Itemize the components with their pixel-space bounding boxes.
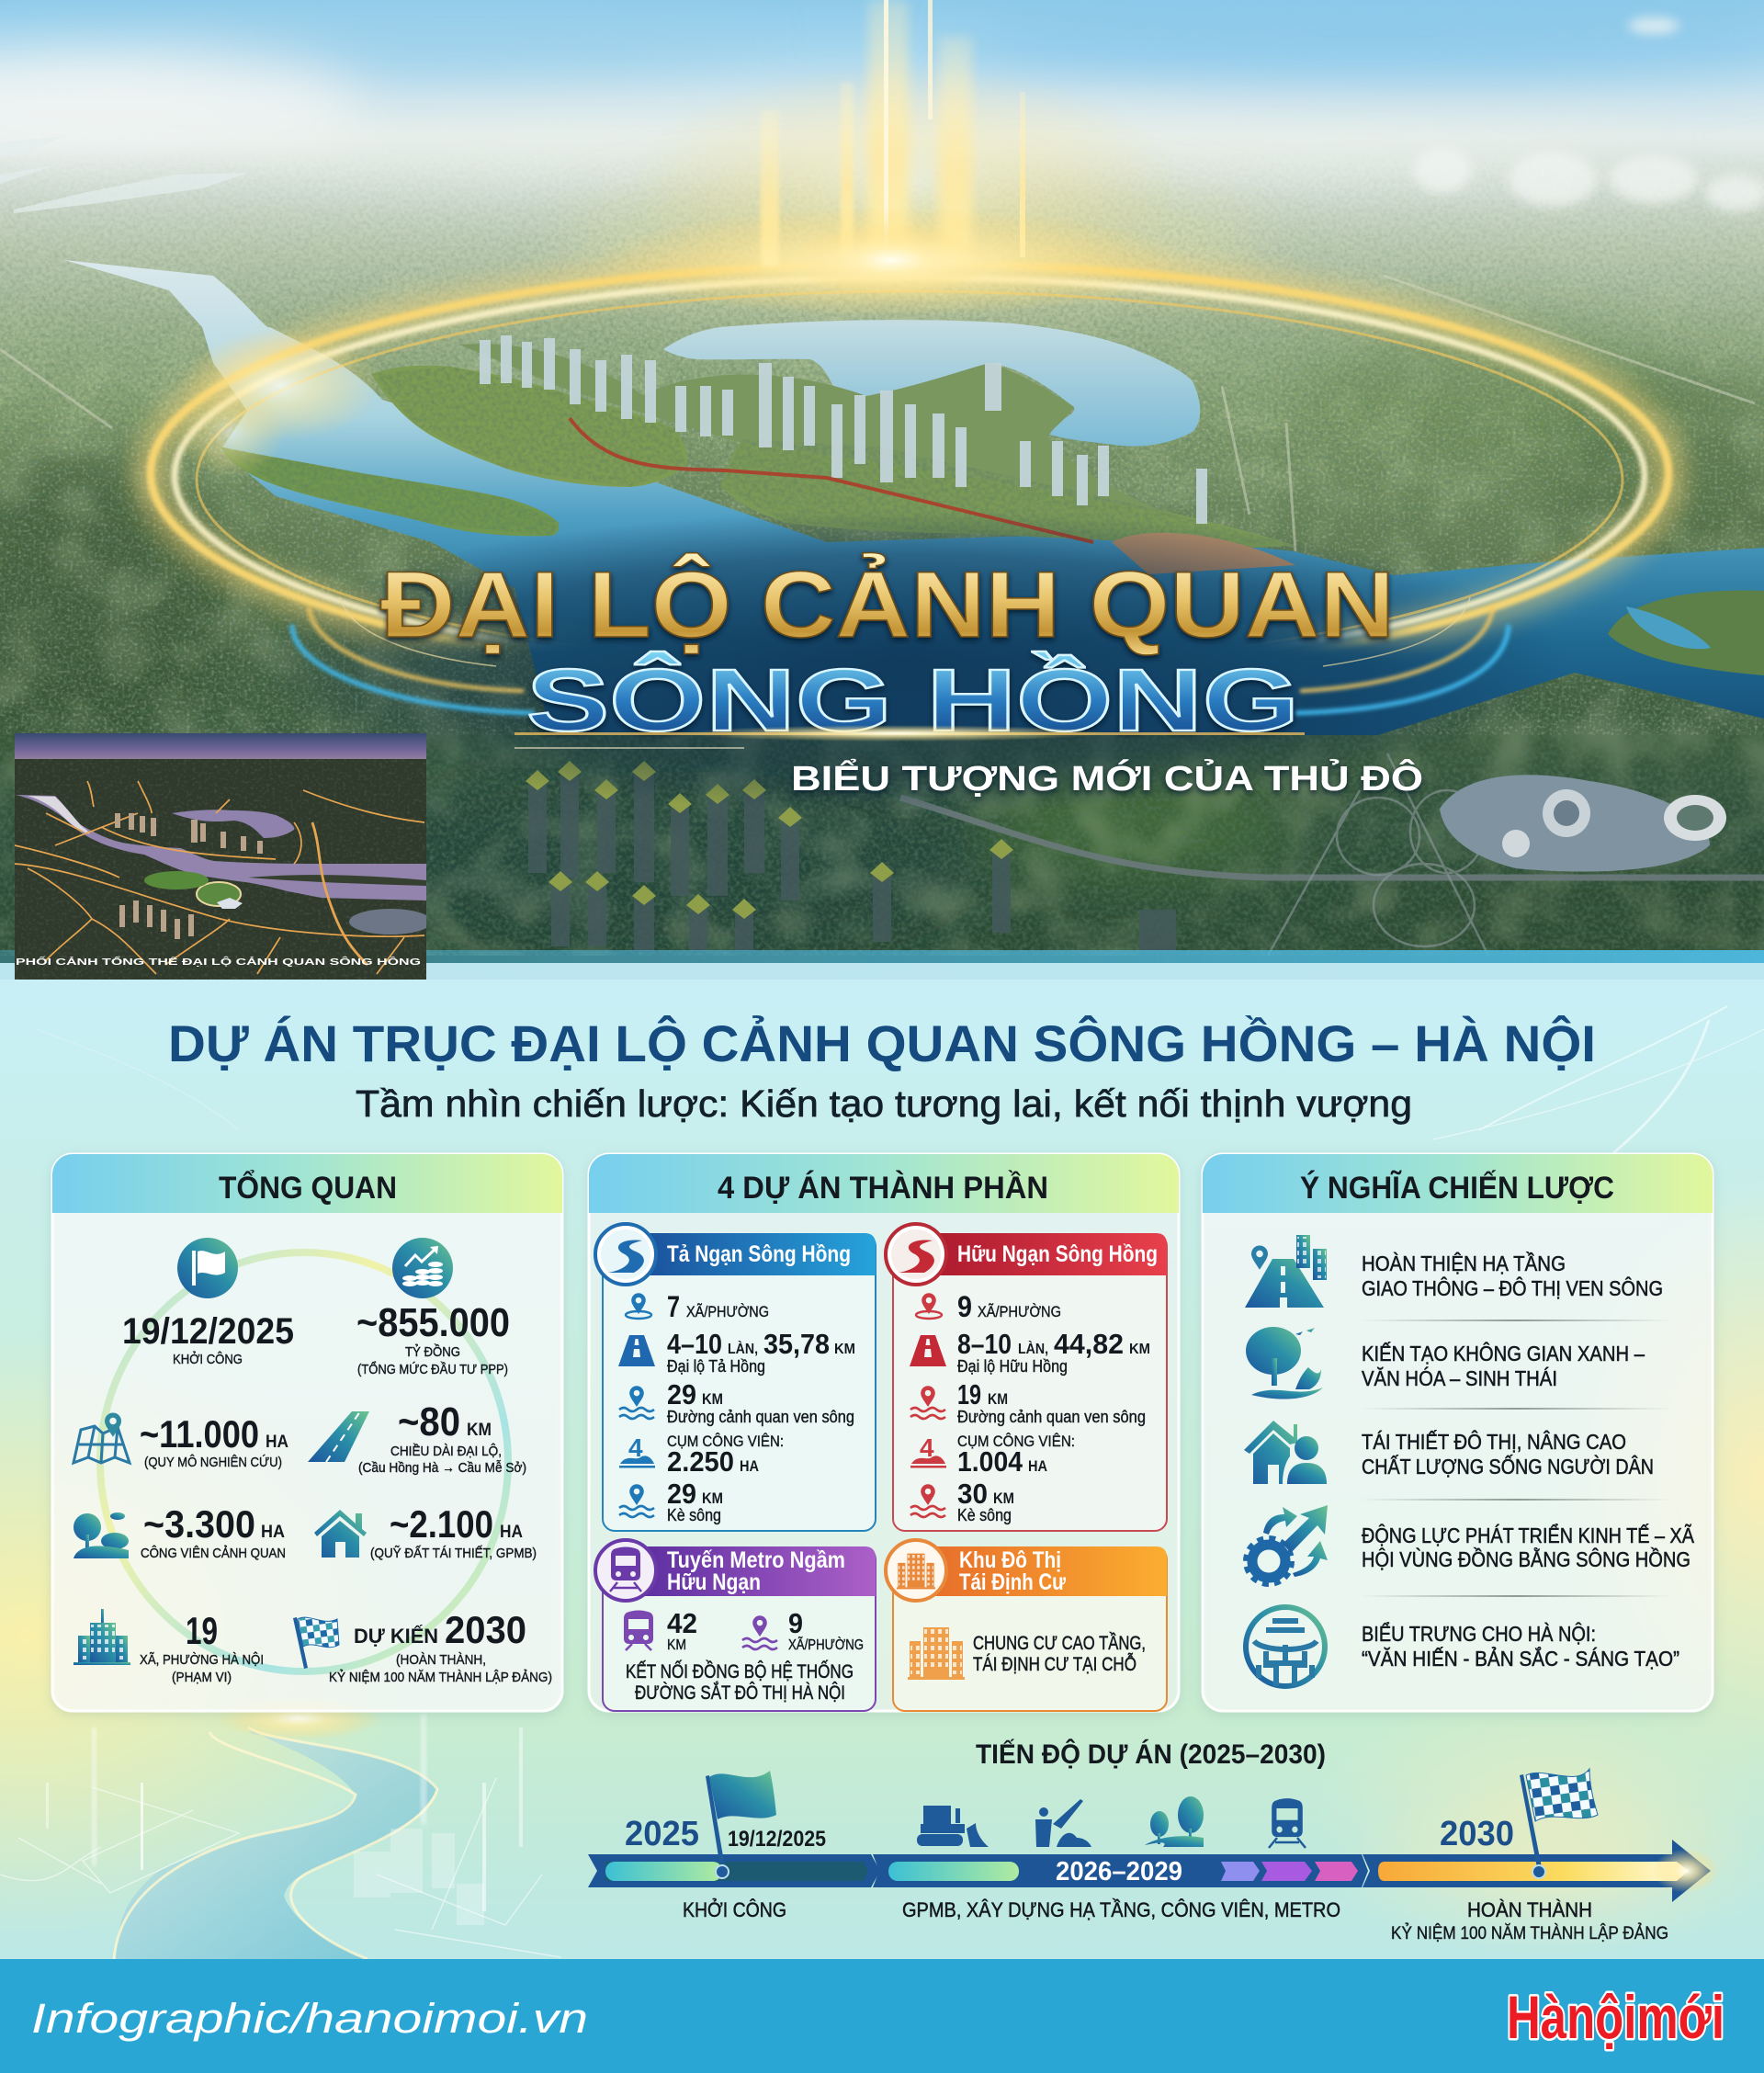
row: park clusters: 4 — [628, 1433, 643, 1462]
card body — [603, 1234, 876, 1531]
stat: land fund: (QUỸ ĐẤT TÁI THIẾT, GPMB) — [370, 1546, 537, 1561]
icon: flag badge — [177, 1238, 238, 1298]
card header — [916, 1233, 1167, 1275]
row: lanes: 4–10 — [667, 1328, 722, 1360]
label 2030: 2030 — [1440, 1815, 1514, 1853]
timeline title: TIẾN ĐỘ DỰ ÁN (2025–2030) — [976, 1739, 1326, 1770]
interchange — [1268, 753, 1488, 956]
row: embankment: Kè sông — [957, 1506, 1012, 1524]
panel heading: TỔNG QUAN — [219, 1171, 397, 1206]
label 2030: HOÀN THÀNH — [1467, 1898, 1592, 1921]
icon: house — [314, 1510, 367, 1558]
night lake — [172, 810, 294, 838]
item: green space — [1246, 1327, 1645, 1399]
stat: land fund: HA — [500, 1523, 523, 1542]
sub card: Hữu Ngạn Sông Hồng — [886, 1224, 1167, 1531]
stat: start date — [122, 1311, 294, 1367]
stat: boulevard length: CHIỀU DÀI ĐẠI LỘ, — [390, 1444, 502, 1459]
stat: completion: 2030 — [445, 1608, 526, 1651]
row: park clusters: HA — [740, 1457, 759, 1475]
bar segment 2025 — [588, 1854, 880, 1887]
row: lanes: Đại lộ Tả Hồng — [667, 1357, 765, 1376]
glow behind arrow head — [1332, 1784, 1764, 1958]
hero subtitle: BIỂU TƯỢNG MỚI CỦA THỦ ĐÔ — [791, 757, 1423, 799]
item: economic drive: ĐỘNG LỰC PHÁT TRIỂN KINH TẾ – XÃ — [1362, 1523, 1695, 1547]
card header — [626, 1233, 876, 1275]
sub heading: Tầm nhìn chiến lược: Kiến tạo tương lai, kết nối thịnh vượng — [356, 1082, 1412, 1125]
item: Hanoi emblem: “VĂN HIẾN - BẢN SẮC - SÁNG TẠO” — [1362, 1645, 1679, 1671]
gold road network — [15, 781, 424, 974]
item: infrastructure: GIAO THÔNG – ĐÔ THỊ VEN SÔNG — [1362, 1275, 1663, 1300]
stat: wards: 19 — [186, 1609, 218, 1652]
panel body — [52, 1154, 562, 1711]
icon: pin and waves — [742, 1615, 777, 1649]
bar segment 2026-2029: 2026–2029 — [1056, 1857, 1182, 1886]
row: lanes: 35,78 — [763, 1328, 830, 1360]
footer — [0, 1959, 1764, 2073]
stat: start date: 19/12/2025 — [122, 1311, 294, 1352]
panel heading: 4 DỰ ÁN THÀNH PHẦN — [718, 1171, 1048, 1206]
orange bridge — [570, 418, 1093, 542]
distant river upper left — [0, 166, 247, 213]
row: lanes — [910, 1328, 1150, 1376]
stat: wards — [140, 1609, 264, 1685]
card title: Tả Ngạn Sông Hồng — [667, 1241, 851, 1267]
title line 2: SÔNG HỒNG — [526, 651, 1299, 750]
highway — [900, 798, 1764, 878]
label construction: GPMB, XÂY DỰNG HẠ TẦNG, CÔNG VIÊN, METRO — [902, 1898, 1340, 1921]
inset image: night perspective of the boulevard — [15, 733, 432, 980]
panel: Ý nghĩa chiến lược — [1203, 1154, 1713, 1711]
icon: train — [624, 1610, 653, 1650]
item: infrastructure: HOÀN THIỆN HẠ TẦNG — [1362, 1251, 1566, 1275]
stadium plaza and sports domes — [1440, 775, 1726, 872]
sky haze — [0, 0, 1764, 184]
row: riverside road: Đường cảnh quan ven sông — [667, 1408, 854, 1426]
stat: land fund: ~2.100 — [390, 1502, 493, 1546]
stat: total investment: ~855.000 — [356, 1300, 510, 1345]
translucent buildings — [354, 1829, 484, 1925]
metro description: KẾT NỐI ĐỒNG BỘ HỆ THỐNG — [626, 1660, 854, 1682]
metro description — [626, 1660, 854, 1704]
row: lanes: 8–10 — [957, 1328, 1012, 1360]
timeline: project progress — [588, 1739, 1764, 1958]
footer credit: Infographic/hanoimoi.vn — [31, 1995, 588, 2042]
stat: metro wards: XÃ/PHƯỜNG — [788, 1635, 864, 1653]
icon: city buildings — [74, 1609, 130, 1665]
plaza right — [349, 909, 432, 935]
panel: Tổng quan — [52, 1154, 562, 1711]
night sky — [15, 733, 426, 763]
glowing river — [116, 1728, 437, 1959]
icon: road — [308, 1411, 369, 1462]
row: embankment: KM — [702, 1490, 723, 1507]
stat: completion: (HOÀN THÀNH, — [396, 1652, 486, 1668]
row: park clusters: 1.004 — [957, 1445, 1023, 1478]
stat: completion — [329, 1608, 552, 1685]
base gradient — [0, 980, 1764, 1959]
row: embankment: 30 — [957, 1478, 988, 1510]
icon: metro train — [1269, 1798, 1306, 1848]
stat: wards: XÃ, PHƯỜNG HÀ NỘI — [140, 1652, 264, 1668]
row: lanes: Đại lộ Hữu Hồng — [957, 1357, 1068, 1376]
lower section background — [0, 980, 1764, 1959]
item: infrastructure — [1245, 1235, 1663, 1308]
panel: 4 dự án thành phần — [589, 1154, 1179, 1711]
row: embankment: 29 — [667, 1478, 696, 1510]
bar segment 2030 — [1363, 1840, 1719, 1902]
footer band — [0, 1959, 1764, 2073]
row: park clusters: CỤM CÔNG VIÊN: — [957, 1433, 1075, 1450]
golf park — [144, 871, 209, 889]
panel header band — [1203, 1154, 1713, 1213]
sub card: Khu Đô Thị Tái Định Cư — [886, 1540, 1167, 1711]
row: lanes — [618, 1328, 855, 1376]
stat: metro length: 42 — [667, 1607, 697, 1639]
row: riverside road — [619, 1378, 854, 1426]
badge — [595, 1540, 656, 1601]
item: economic drive — [1246, 1505, 1695, 1584]
row: riverside road: Đường cảnh quan ven sông — [957, 1408, 1146, 1426]
item: urban renewal: TÁI THIẾT ĐÔ THỊ, NÂNG CAO — [1362, 1429, 1626, 1454]
row: riverside road: KM — [988, 1390, 1008, 1408]
right island with pond — [1608, 591, 1764, 675]
card title: Khu Đô Thị — [959, 1547, 1061, 1573]
stat: total investment: (TỔNG MỨC ĐẦU TƯ PPP) — [357, 1361, 508, 1377]
stat: boulevard length: (Cầu Hồng Hà → Cầu Mễ Sở) — [358, 1460, 526, 1476]
panel body — [1203, 1154, 1713, 1711]
row: riverside road: 29 — [667, 1378, 696, 1410]
lake north peninsula — [459, 344, 1176, 515]
card body — [893, 1547, 1167, 1711]
icon: park — [74, 1512, 129, 1558]
night river — [16, 795, 426, 901]
stat: land fund — [370, 1502, 537, 1561]
stat: park area: ~3.300 — [143, 1502, 255, 1546]
panel heading: Ý NGHĨA CHIẾN LƯỢC — [1300, 1171, 1614, 1206]
inset towers — [115, 813, 263, 939]
sky and land base — [0, 0, 1764, 980]
night river highlight — [28, 796, 89, 833]
bottom strip of hero — [0, 950, 1764, 980]
stat: total investment — [356, 1300, 510, 1377]
row: wards: 9 — [957, 1290, 972, 1323]
red river main channel — [64, 260, 1764, 735]
row: embankment: KM — [993, 1490, 1014, 1507]
item: green space: KIẾN TẠO KHÔNG GIAN XANH – — [1362, 1341, 1645, 1365]
stat: completion: DỰ KIẾN — [354, 1625, 438, 1648]
icon: coins with rising arrow — [392, 1238, 453, 1298]
land tone patches — [0, 179, 1764, 983]
icon: bulldozer — [917, 1806, 989, 1847]
row: riverside road: KM — [702, 1390, 723, 1408]
item: economic drive: HỘI VÙNG ĐỒNG BẰNG SÔNG HỒNG — [1362, 1546, 1690, 1571]
icon: checkered flag — [293, 1617, 339, 1669]
card body — [893, 1234, 1167, 1531]
badge — [886, 1540, 946, 1601]
row: riverside road: 19 — [957, 1378, 981, 1410]
row: lanes: LÀN, — [728, 1340, 758, 1357]
stat: metro wards: 9 — [788, 1607, 803, 1639]
row: wards: 7 — [667, 1290, 680, 1323]
tower roofs — [526, 761, 1013, 919]
golden light ring — [151, 264, 1668, 683]
card title: Tái Định Cư — [959, 1569, 1067, 1595]
title line 1: ĐẠI LỘ CẢNH QUAN — [380, 552, 1395, 657]
row: wards: XÃ/PHƯỜNG — [686, 1303, 769, 1320]
lower towers — [528, 772, 1176, 952]
icon: park with trees — [1145, 1796, 1204, 1847]
stat: total investment: TỶ ĐỒNG — [405, 1343, 460, 1360]
icon: apartment buildings — [908, 1627, 965, 1680]
description: TÁI ĐỊNH CƯ TẠI CHỖ — [973, 1653, 1136, 1675]
stat: start date: KHỞI CÔNG — [173, 1351, 243, 1367]
light pylons — [46, 1714, 523, 1911]
card title: Hữu Ngạn — [667, 1569, 761, 1595]
card body — [603, 1547, 876, 1711]
warm glow right — [1562, 1176, 1764, 1783]
stat: study scale: ~11.000 — [140, 1412, 259, 1456]
label 2030 — [1391, 1815, 1668, 1943]
row: wards — [626, 1290, 769, 1323]
card header — [916, 1546, 1167, 1596]
stat: park area — [141, 1502, 286, 1561]
row: embankment — [619, 1478, 723, 1524]
row: park clusters — [910, 1433, 1075, 1478]
gold line under title — [514, 725, 1305, 749]
item: green space: VĂN HÓA – SINH THÁI — [1362, 1366, 1557, 1390]
row: park clusters: 2.250 — [667, 1445, 734, 1478]
night city ground — [15, 759, 426, 980]
description: CHUNG CƯ CAO TẦNG, — [973, 1633, 1146, 1654]
stat: metro length: KM — [667, 1637, 686, 1653]
panel header band — [52, 1154, 562, 1213]
clouds upper right — [1413, 17, 1764, 211]
lower left island — [220, 447, 559, 536]
sub card: Tả Ngạn Sông Hồng — [595, 1224, 876, 1531]
label 2025: KHỞI CÔNG — [683, 1898, 786, 1921]
towers on peninsula — [480, 335, 1207, 524]
stadium — [197, 882, 243, 909]
row: wards — [916, 1290, 1061, 1323]
haze above ring — [629, 64, 1181, 303]
card title — [959, 1547, 1067, 1595]
flare above river — [216, 1696, 381, 1740]
badge — [595, 1224, 656, 1285]
icon: worker and excavator — [1035, 1799, 1091, 1847]
row: park clusters — [619, 1433, 784, 1478]
bar segment 2026-2029 — [873, 1854, 1368, 1887]
stat: boulevard length: KM — [467, 1421, 492, 1440]
stat: study scale: (QUY MÔ NGHIÊN CỨU) — [144, 1455, 282, 1470]
row: embankment — [910, 1478, 1014, 1524]
card title — [667, 1547, 845, 1595]
stat: study scale: HA — [266, 1433, 288, 1452]
item: urban renewal — [1244, 1421, 1654, 1484]
stat: study scale — [140, 1412, 288, 1470]
decorative ring — [100, 1252, 508, 1671]
row: park clusters: 4 — [920, 1433, 934, 1462]
stat: metro wards — [788, 1607, 864, 1653]
hero image: aerial view of the Red River landscape boulevard — [0, 0, 1764, 983]
central peninsula — [720, 438, 1294, 548]
metro description: ĐƯỜNG SẮT ĐÔ THỊ HÀ NỘI — [635, 1682, 845, 1704]
ring flare — [175, 207, 1185, 478]
icon: map with pin — [74, 1413, 130, 1463]
row: embankment: Kè sông — [667, 1506, 721, 1524]
card header — [626, 1546, 876, 1596]
flag 2030 — [1520, 1769, 1598, 1878]
row: park clusters: CỤM CÔNG VIÊN: — [667, 1433, 784, 1450]
row: riverside road — [910, 1378, 1146, 1426]
label 2025: 2025 — [625, 1815, 699, 1853]
main lake — [663, 320, 1200, 447]
panel header band — [589, 1154, 1179, 1213]
description — [973, 1633, 1146, 1675]
flag 2025 — [706, 1771, 776, 1878]
panel body — [589, 1154, 1179, 1711]
inset caption: PHỐI CẢNH TỔNG THỂ ĐẠI LỘ CẢNH QUAN SÔNG HỒNG — [16, 955, 421, 968]
island texture — [211, 358, 1314, 551]
stat: park area: CÔNG VIÊN CẢNH QUAN — [141, 1546, 286, 1561]
row: lanes: 44,82 — [1054, 1328, 1124, 1360]
dark glow behind title — [243, 510, 1566, 813]
circuit lines — [0, 1778, 560, 1957]
row: lanes: KM — [834, 1342, 855, 1357]
warm glow bottom right — [1314, 1691, 1764, 1911]
badge — [886, 1224, 946, 1285]
row: park clusters: HA — [1028, 1457, 1047, 1475]
river islets — [248, 875, 426, 886]
label 2025 — [625, 1815, 826, 1921]
label 2025: 19/12/2025 — [728, 1827, 826, 1852]
card title: Hữu Ngạn Sông Hồng — [957, 1241, 1158, 1267]
stat: boulevard length: ~80 — [398, 1399, 460, 1444]
row: lanes: KM — [1129, 1342, 1150, 1357]
top right light streaks — [37, 1006, 1764, 1158]
sub card: Tuyến Metro Ngầm Hữu Ngạn — [595, 1540, 876, 1711]
river glow edges — [114, 1728, 437, 1959]
stat: boulevard length — [358, 1399, 526, 1476]
tan town — [1112, 533, 1295, 574]
item: Hanoi emblem — [1246, 1607, 1679, 1686]
stat: metro length — [667, 1607, 697, 1653]
city light texture — [15, 759, 426, 980]
stat: park area: HA — [261, 1523, 285, 1542]
item: Hanoi emblem: BIỂU TRƯNG CHO HÀ NỘI: — [1362, 1621, 1596, 1646]
label 2030: KỶ NIỆM 100 NĂM THÀNH LẬP ĐẢNG — [1391, 1923, 1668, 1943]
main heading: DỰ ÁN TRỤC ĐẠI LỘ CẢNH QUAN SÔNG HỒNG – HÀ NỘI — [168, 1014, 1596, 1072]
warm glow left — [0, 1332, 413, 1939]
row: lanes: LÀN, — [1018, 1340, 1048, 1357]
row: wards: XÃ/PHƯỜNG — [978, 1303, 1061, 1320]
vertical light beams — [761, 0, 1025, 266]
stat: completion: KỶ NIỆM 100 NĂM THÀNH LẬP ĐẢNG) — [329, 1670, 552, 1685]
item: urban renewal: CHẤT LƯỢNG SỐNG NGƯỜI DÂN — [1362, 1454, 1654, 1478]
stat: wards: (PHẠM VI) — [172, 1670, 232, 1685]
land texture — [0, 138, 1764, 956]
roads in distance — [0, 276, 1755, 551]
swirl arcs around title — [292, 597, 1509, 713]
left island — [371, 366, 687, 487]
card title: Tuyến Metro Ngầm — [667, 1547, 845, 1573]
